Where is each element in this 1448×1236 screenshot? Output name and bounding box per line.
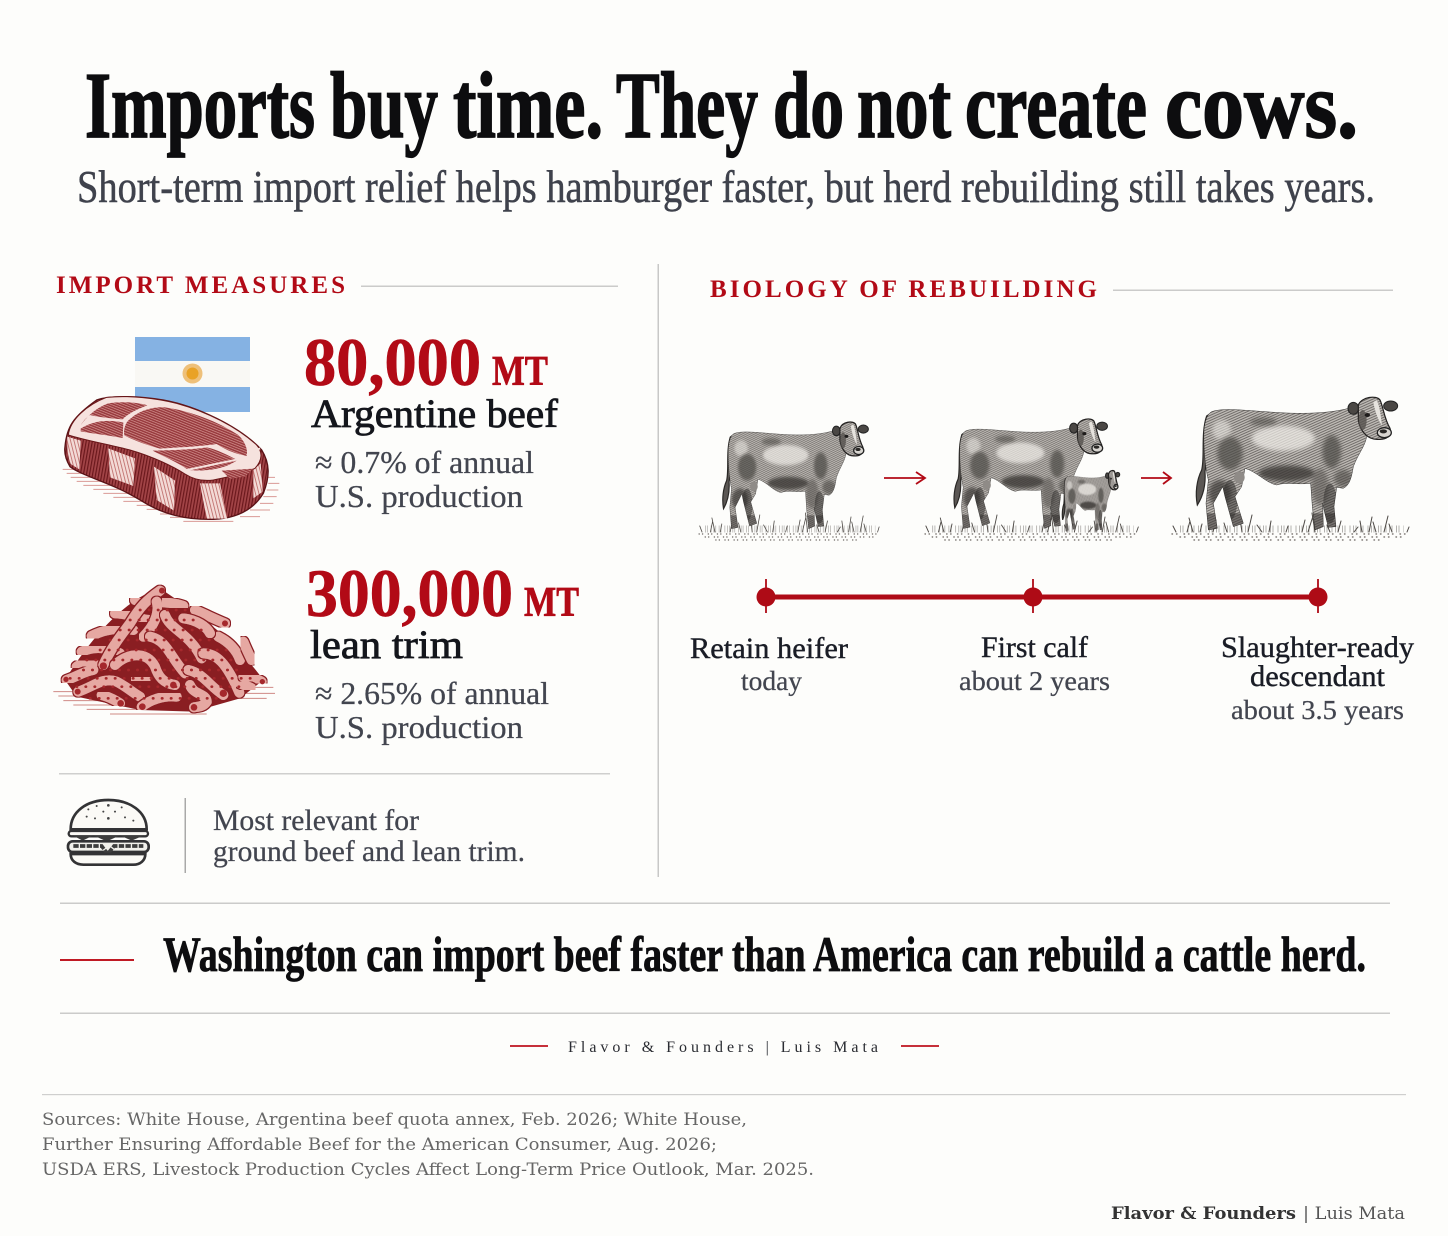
label: Argentine beef: Argentine beef (311, 391, 559, 436)
title: They (616, 54, 758, 158)
timeline (756, 579, 1328, 613)
note: share of production: U.S. production (315, 709, 523, 745)
label: slaughter-ready descendant: about 3.5 years (1231, 695, 1404, 725)
label: first calf (959, 631, 1110, 696)
note: most relevant: Most relevant for (213, 804, 419, 837)
label: retain heifer: Retain heifer (690, 632, 848, 665)
icon: steak (63, 397, 279, 521)
stat: 300,000 MT: 300,000 (306, 555, 513, 631)
title: Imports (85, 54, 315, 158)
label: first calf: First calf (981, 631, 1088, 664)
credit: Flavor & Founders (1111, 1204, 1296, 1224)
title: time. (453, 54, 603, 158)
note: share of production (315, 444, 534, 514)
heading: import measures: IMPORT MEASURES (56, 272, 345, 299)
icon: Argentine flag (135, 337, 250, 412)
note: share of production: ≈ 2.65% of annual (315, 675, 549, 711)
note: most relevant: ground beef and lean trim. (213, 835, 525, 868)
icon: hamburger (68, 800, 149, 865)
note: share of production (315, 675, 549, 745)
label: slaughter-ready descendant: descendant (1250, 660, 1386, 693)
credit: | Luis Mata (1303, 1204, 1405, 1224)
credit (1111, 1204, 1405, 1224)
note: share of production: ≈ 0.7% of annual (315, 444, 534, 480)
sources: Sources: White House, Argentina beef quota annex, Feb. 2026; White House, (42, 1110, 747, 1130)
panel: biology of rebuilding (690, 276, 1414, 725)
sources: USDA ERS, Livestock Production Cycles Affect Long-Term Price Outlook, Mar. 2025. (42, 1160, 814, 1180)
icon: ground meat pile (53, 588, 275, 714)
arrow: heifer to cow (884, 472, 925, 484)
sources: Further Ensuring Affordable Beef for the American Consumer, Aug. 2026; (42, 1135, 717, 1155)
stat: 80,000 MT: 80,000 (304, 324, 481, 400)
icon: cow with calf (925, 419, 1141, 540)
title: create (965, 54, 1147, 158)
label: lean trim: lean trim (310, 622, 463, 667)
icon: slaughter-ready descendant (1172, 397, 1412, 540)
byline: Flavor & Founders | Luis Mata (568, 1039, 878, 1056)
icon: heifer (699, 422, 881, 540)
title: cows. (1165, 54, 1358, 158)
label: retain heifer: today (741, 666, 802, 696)
title (85, 54, 1358, 158)
sources (42, 1110, 814, 1180)
note: most relevant (213, 804, 525, 868)
label: retain heifer (690, 632, 848, 696)
heading: biology of rebuilding: BIOLOGY OF REBUILDING (710, 276, 1097, 303)
title: buy (330, 54, 438, 158)
arrow: cow to descendant (1141, 472, 1171, 484)
stat: 300,000 MT: MT (524, 580, 579, 626)
label: first calf: about 2 years (959, 666, 1110, 696)
label: slaughter-ready descendant: Slaughter-ready (1221, 631, 1414, 664)
title: not (857, 54, 951, 158)
title: do (773, 54, 844, 158)
stat: 80,000 MT: MT (492, 349, 548, 395)
panel: import measures (53, 272, 618, 873)
note: share of production: U.S. production (315, 478, 523, 514)
label: slaughter-ready descendant (1221, 631, 1414, 725)
